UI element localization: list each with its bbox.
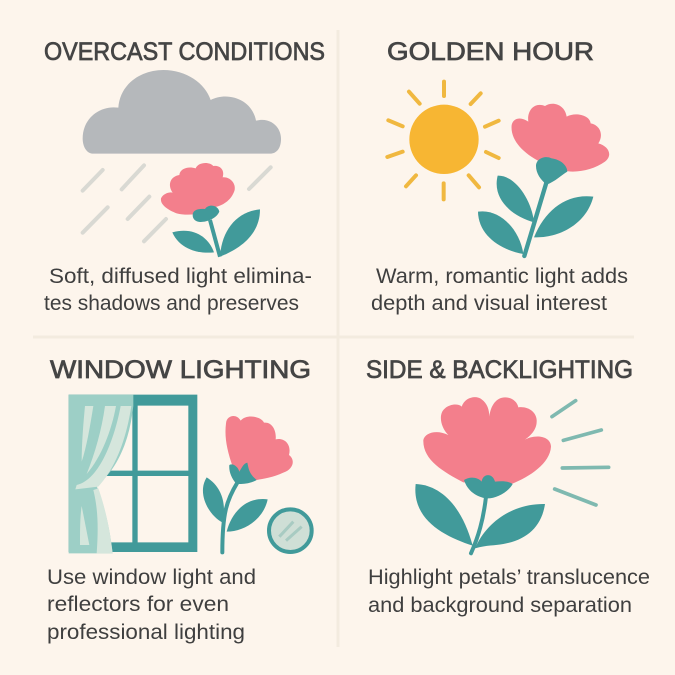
heading: overcast conditions: OVERCAST CONDITIONS [44, 38, 325, 66]
text: overcast description: Soft, diffused light elimina- [49, 265, 312, 288]
panel: golden hour [371, 38, 628, 315]
panel: overcast conditions [44, 38, 325, 315]
panel: side and backlighting [366, 356, 650, 617]
text: window lighting description: professional lighting [47, 621, 245, 644]
text: golden hour description: Warm, romantic light adds [376, 265, 628, 288]
text: overcast description [44, 265, 312, 315]
text: window lighting description: Use window light and [47, 566, 256, 589]
text: window lighting description [47, 566, 256, 644]
icon: round reflector [269, 509, 312, 552]
heading: window lighting: WINDOW LIGHTING [50, 356, 311, 384]
text: side and backlighting description [368, 566, 650, 617]
text: side and backlighting description: Highlight petals’ translucence [368, 566, 650, 589]
icon: flower under rain [161, 163, 260, 257]
icon: light rays [552, 401, 609, 505]
heading: golden hour: GOLDEN HOUR [387, 38, 594, 66]
icon: flower in sunlight [478, 104, 609, 256]
text: side and backlighting description: and background separation [368, 594, 632, 617]
icon: rain cloud [83, 70, 281, 241]
text: overcast description: tes shadows and preserves [44, 292, 299, 315]
icon: sun [387, 82, 499, 199]
icon: flower by window [203, 416, 293, 552]
heading: side and backlighting: SIDE & BACKLIGHTING [366, 356, 633, 384]
panel: window lighting [47, 356, 312, 644]
text: golden hour description: depth and visual interest [371, 292, 607, 315]
text: golden hour description [371, 265, 628, 315]
icon: window with curtain [69, 395, 197, 553]
text: window lighting description: reflectors for even [47, 593, 229, 616]
icon: backlit flower [415, 397, 551, 553]
